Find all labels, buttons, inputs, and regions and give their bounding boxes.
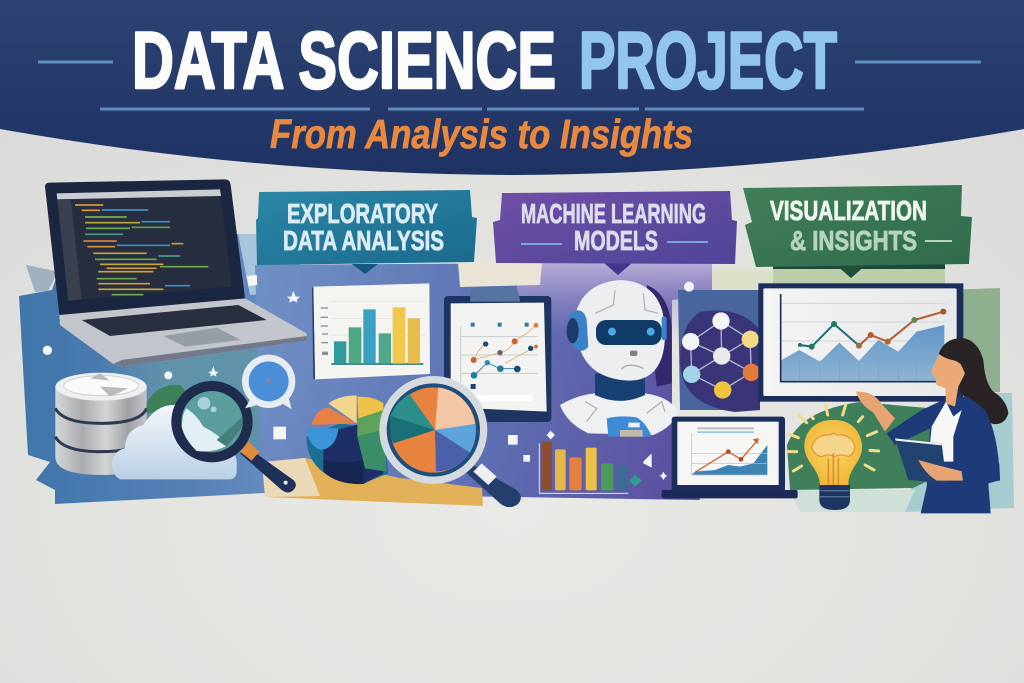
face and neck [931, 353, 965, 407]
icon: speech bubble [242, 355, 295, 409]
jacket sleeve [962, 463, 1000, 483]
title: PROJECT [579, 16, 837, 106]
banner text: visualization: VISUALIZATION [770, 195, 927, 226]
icon: magnifying glass [171, 381, 296, 492]
network graph [682, 312, 760, 399]
banner text: data analysis: DATA ANALYSIS [283, 225, 444, 256]
bars [334, 307, 420, 364]
panel: visualization background [678, 268, 1014, 512]
panel: cream corner under pie [262, 458, 320, 497]
pie chart 3D [307, 395, 388, 484]
line series [798, 309, 946, 350]
panel: centre to machine learning gradient background [255, 262, 712, 500]
subtitle: From Analysis to Insights [270, 111, 693, 157]
panel dots and stars [43, 275, 300, 439]
jacket body [887, 397, 1000, 513]
icon: large magnifying glass with pie [379, 376, 521, 507]
icon: database cylinders [55, 373, 147, 475]
banner text: exploratory: EXPLORATORY [287, 198, 438, 229]
banner: visualization and insights [743, 185, 972, 278]
bar chart: small multicolour [539, 442, 628, 493]
banner text: models: MODELS [574, 225, 658, 256]
hand on tablet [918, 460, 963, 481]
bulb rays [788, 405, 879, 471]
accents: robot panel shapes [508, 431, 667, 480]
hair back [953, 342, 1008, 424]
banner text: insights: & INSIGHTS [790, 225, 917, 256]
banner: machine learning models [493, 191, 737, 275]
pie inside lens [390, 387, 476, 473]
icon: robot [560, 280, 678, 437]
panel: yellow base under pie [262, 458, 483, 506]
trackpad [163, 328, 241, 347]
icon: laptop with code [45, 179, 307, 367]
line chart monitor [758, 283, 963, 402]
keyboard [82, 305, 267, 336]
green arc behind magnifier [147, 385, 190, 413]
code lines [75, 205, 208, 295]
header band [0, 0, 1024, 175]
small laptop with chart [662, 417, 798, 498]
banner: exploratory data analysis [256, 190, 477, 274]
title: DATA SCIENCE [132, 16, 556, 106]
icon: cloud [112, 405, 237, 479]
shirt [928, 402, 962, 462]
area series [781, 325, 944, 382]
hair top [939, 338, 984, 390]
tablet [895, 438, 947, 483]
accent: green diamond [629, 475, 642, 487]
presenter figure [856, 338, 1008, 513]
banner text: machine learning: MACHINE LEARNING [521, 198, 706, 229]
icon: lightbulb [788, 405, 879, 510]
chart card: scatter clipboard [444, 287, 551, 422]
dot accent [684, 282, 694, 292]
title side rules [38, 60, 981, 110]
panel: cream tape behind clipboard [458, 262, 542, 287]
clipboard clip [470, 287, 520, 302]
panel: lavender wash behind robot [517, 262, 712, 340]
chart card: bar chart [312, 283, 430, 379]
panel: exploratory background [19, 234, 300, 504]
scatter series [471, 323, 538, 389]
pointing arm [856, 392, 895, 432]
